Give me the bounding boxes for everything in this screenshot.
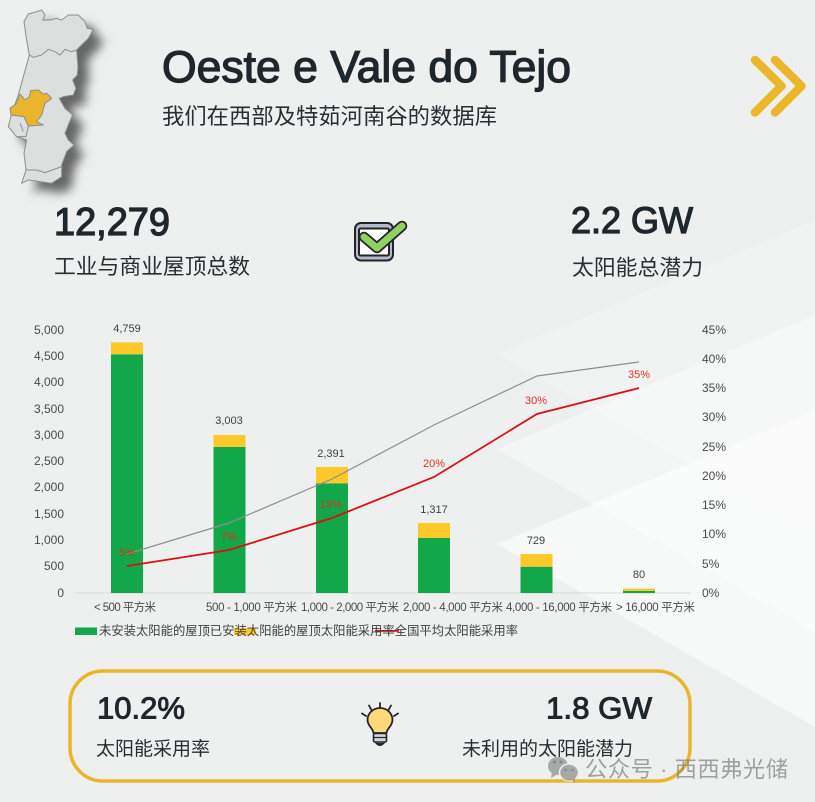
right axis labels: 25% — [702, 440, 726, 454]
category labels: 2,000 - 4,000 平方米 — [403, 600, 504, 614]
left axis labels: 500 — [44, 559, 64, 573]
category labels: 1,000 - 2,000 平方米 — [301, 600, 400, 614]
left axis labels: 3,000 — [34, 428, 64, 442]
stat: adoption rate: 太阳能采用率 — [96, 738, 210, 760]
panel: adoption summary — [70, 671, 690, 781]
stat: untapped potential: 1.8 GW — [546, 690, 653, 726]
adoption rate labels: 13% — [320, 499, 342, 511]
icon: Portugal map — [8, 10, 104, 193]
green bars: rooftops without solar — [111, 354, 655, 593]
bar total labels — [113, 323, 645, 581]
right axis labels — [702, 323, 726, 600]
right axis labels: 15% — [702, 498, 726, 512]
bar total labels: 1,317 — [420, 504, 448, 516]
category labels: 4,000 - 16,000 平方米 — [506, 600, 612, 614]
chart: rooftops by size with adoption rate — [34, 323, 726, 638]
yellow bars: rooftops with solar — [111, 342, 655, 591]
right axis labels: 30% — [702, 410, 726, 424]
stat: adoption rate — [96, 690, 210, 760]
left axis labels: 5,000 — [34, 323, 64, 337]
icon: checkbox — [355, 223, 402, 260]
baseline axis — [75, 592, 691, 594]
title: Oeste e Vale do Tejo — [162, 43, 571, 92]
red line: solar adoption rate — [127, 388, 639, 566]
watermark — [548, 757, 788, 783]
category labels: 500 - 1,000 平方米 — [206, 600, 298, 614]
bar total labels: 2,391 — [317, 448, 345, 460]
left axis labels: 1,500 — [34, 507, 64, 521]
grey line: national average adoption — [127, 362, 639, 554]
icon: light bulb — [362, 703, 398, 745]
left axis labels: 1,000 — [34, 533, 64, 547]
stat: total solar potential: 2.2 GW — [571, 200, 693, 241]
left axis labels: 4,000 — [34, 375, 64, 389]
right axis labels: 10% — [702, 527, 726, 541]
category labels — [94, 600, 696, 614]
background triangles — [497, 220, 815, 727]
left axis labels: 0 — [57, 586, 64, 600]
icon: double chevron arrow — [755, 60, 802, 112]
stat: untapped potential: 未利用的太阳能潜力 — [462, 738, 633, 760]
legend: 未安装太阳能的屋顶已安装太阳能的屋顶太阳能采用率全国平均太阳能采用率 — [99, 623, 518, 638]
watermark text: 公众号 · 西西弗光储 — [585, 757, 788, 782]
right axis labels: 0% — [702, 586, 720, 600]
adoption rate labels: 30% — [525, 395, 547, 407]
icon: wechat — [548, 757, 578, 783]
bar total labels: 729 — [527, 535, 545, 547]
adoption rate labels: 7% — [221, 531, 237, 543]
left axis labels: 2,000 — [34, 480, 64, 494]
subtitle: 我们在西部及特茹河南谷的数据库 — [162, 104, 497, 129]
right axis labels: 5% — [702, 557, 720, 571]
stat: total solar potential — [571, 200, 703, 280]
left axis labels: 2,500 — [34, 454, 64, 468]
adoption rate labels: 5% — [119, 547, 135, 559]
adoption rate labels — [119, 369, 650, 559]
right axis labels: 45% — [702, 323, 726, 337]
bar total labels: 80 — [633, 569, 645, 581]
right axis labels: 40% — [702, 352, 726, 366]
stat: total rooftops: 12,279 — [54, 201, 170, 244]
stat: untapped potential — [462, 690, 653, 760]
stat: total rooftops: 工业与商业屋顶总数 — [54, 254, 250, 279]
stat: adoption rate: 10.2% — [97, 690, 185, 726]
right axis labels: 20% — [702, 469, 726, 483]
bar total labels: 4,759 — [113, 323, 141, 335]
left axis labels — [34, 323, 64, 600]
adoption rate labels: 35% — [628, 369, 650, 381]
right axis labels: 35% — [702, 381, 726, 395]
stat: total solar potential: 太阳能总潜力 — [572, 255, 703, 280]
left axis labels: 4,500 — [34, 349, 64, 363]
bar total labels: 3,003 — [215, 415, 243, 427]
stat: total rooftops — [54, 201, 250, 279]
category labels: > 16,000 平方米 — [616, 600, 696, 614]
adoption rate labels: 20% — [423, 458, 445, 470]
category labels: < 500 平方米 — [94, 600, 156, 614]
left axis labels: 3,500 — [34, 402, 64, 416]
